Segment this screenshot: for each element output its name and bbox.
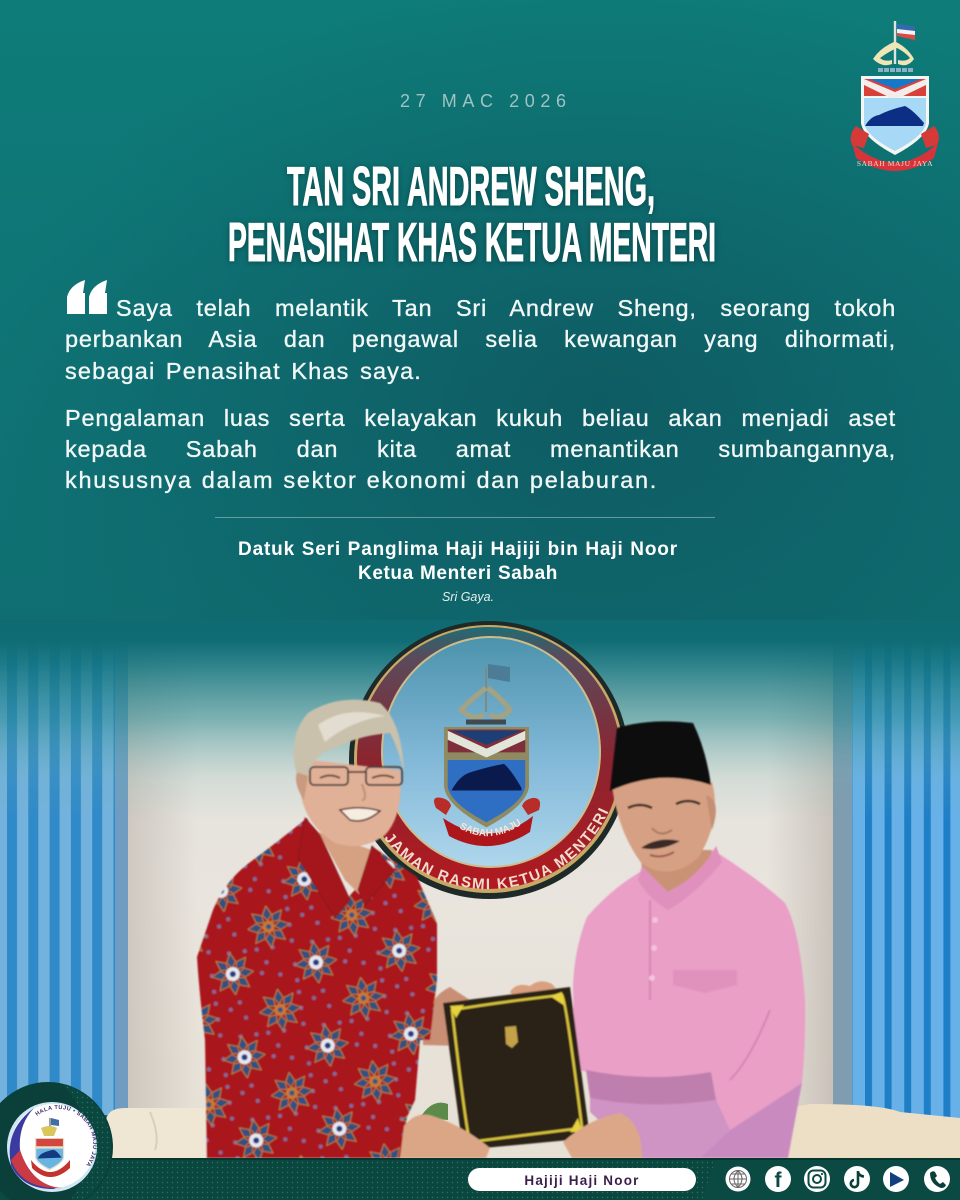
badge crest bbox=[31, 1118, 70, 1177]
name pill bbox=[468, 1168, 696, 1191]
hand behind folder: guest bbox=[423, 987, 470, 1046]
man in pink baju with songkok bbox=[573, 721, 805, 1158]
title bbox=[228, 155, 716, 273]
text: Pengalaman luas serta kelayakan kukuh beliau akan menjadi aset bbox=[65, 405, 896, 431]
text: khususnya dalam sektor ekonomi dan pelaburan. bbox=[65, 467, 658, 493]
left sofa bbox=[106, 1108, 205, 1158]
divider bbox=[215, 517, 715, 518]
small flowers behind folder bbox=[420, 1103, 448, 1120]
wall crest: SABAH MAJU JAYA bbox=[460, 818, 520, 836]
crest: Sabah coat of arms bbox=[851, 21, 939, 171]
wall crest bbox=[434, 664, 540, 846]
text: sebagai Penasihat Khas saya. bbox=[65, 358, 422, 384]
sampin bbox=[586, 1070, 716, 1105]
left curtain bbox=[0, 620, 128, 1115]
text: kepada Sabah dan kita amat menantikan sumbangannya, bbox=[65, 436, 896, 462]
photo background: wall and curtains bbox=[0, 621, 960, 1158]
icon: tiktok bbox=[844, 1166, 870, 1192]
shield bbox=[861, 76, 929, 155]
icon: youtube play bbox=[883, 1166, 909, 1192]
quote text: first paragraph bbox=[65, 295, 896, 384]
wall ribbon bbox=[434, 797, 540, 815]
face bbox=[612, 777, 715, 872]
text: Saya telah melantik Tan Sri Andrew Sheng, seorang tokoh bbox=[116, 295, 896, 321]
glasses bbox=[310, 767, 402, 785]
crest: Sabah coat of arms: SABAH MAJU JAYA bbox=[857, 159, 933, 168]
signature block bbox=[238, 539, 678, 604]
ribbon bbox=[851, 126, 939, 148]
icon: instagram bbox=[804, 1166, 830, 1192]
icon: facebook bbox=[765, 1166, 791, 1192]
right sofa bbox=[785, 1104, 960, 1158]
bottom bar bbox=[0, 1158, 960, 1200]
signature block: Sri Gaya. bbox=[442, 590, 494, 604]
collar bbox=[638, 846, 722, 910]
hand behind folder: chief minister bbox=[510, 981, 575, 1020]
icon: quotation mark bbox=[67, 280, 107, 314]
right curtain bbox=[833, 620, 960, 1125]
hand on folder: chief minister bbox=[563, 1113, 642, 1158]
date: 27 MAC 2026 bbox=[400, 91, 566, 111]
document folder bbox=[443, 987, 590, 1150]
ring lettering: JAMAN RASMI KETUA MENTERI bbox=[385, 808, 608, 889]
people in the photograph bbox=[197, 700, 805, 1158]
icon: facebook: f bbox=[774, 1169, 782, 1192]
signature block: Ketua Menteri Sabah bbox=[358, 563, 558, 584]
man in red batik shirt bbox=[197, 700, 437, 1158]
signature block: Datuk Seri Panglima Haji Hajiji bin Haji Noor bbox=[238, 539, 678, 560]
icon: website bbox=[726, 1166, 750, 1192]
quote text: second paragraph bbox=[65, 405, 896, 494]
flag bbox=[894, 21, 896, 64]
badge: Hala Tuju logo: HALA TUJU • SABAH MAJU JAYA bbox=[35, 1105, 97, 1166]
shirt pocket bbox=[673, 970, 737, 993]
icon: phone bbox=[924, 1166, 950, 1192]
hand on folder: guest bbox=[400, 1114, 490, 1158]
name pill: Hajiji Haji Noor bbox=[524, 1173, 640, 1188]
wall emblem: Seri Gaya seal bbox=[349, 621, 625, 899]
neck bbox=[640, 850, 712, 892]
teal fade over the top of the photo bbox=[0, 620, 960, 820]
gold arms bbox=[873, 42, 914, 65]
text: perbankan Asia dan pengawal selia kewangan yang dihormati, bbox=[65, 326, 896, 352]
badge: Hala Tuju logo bbox=[0, 1082, 113, 1200]
